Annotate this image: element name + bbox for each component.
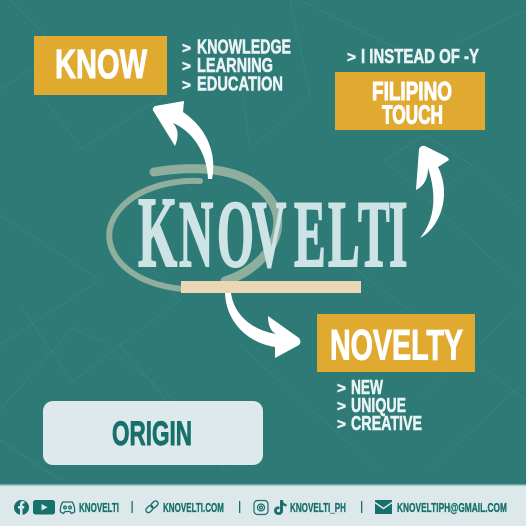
text block: novelty list: CREATIVE <box>351 412 422 435</box>
logo wordmark: KNOVELTI <box>138 177 407 289</box>
text block: novelty list <box>337 376 422 435</box>
text block: i instead of y: I INSTEAD OF -Y <box>361 45 479 68</box>
logo underline <box>181 281 361 293</box>
text block: know list: > <box>182 40 191 57</box>
text block: i instead of y <box>347 45 479 68</box>
panel: origin: ORIGIN <box>112 415 192 453</box>
icon: youtube <box>33 500 55 514</box>
text block: novelty list: UNIQUE <box>351 394 406 417</box>
icon: mail <box>375 500 392 514</box>
panel: know: KNOW <box>55 41 147 87</box>
icon: link <box>145 500 159 514</box>
panel: filipino touch: TOUCH <box>382 100 443 130</box>
panel: filipino touch <box>335 72 485 130</box>
text block: novelty list: > <box>337 380 346 397</box>
text block: i instead of y: > <box>347 49 356 66</box>
arrow: logo to novelty <box>225 293 300 358</box>
logo circle scribble <box>109 169 278 289</box>
panel: novelty <box>317 314 475 372</box>
footer text: discord handle: KNOVELTI <box>79 501 119 515</box>
text block: know list: KNOWLEDGE <box>197 36 291 58</box>
text block: know list <box>182 36 291 96</box>
panel: filipino touch: FILIPINO <box>372 76 452 106</box>
footer bar <box>0 484 526 526</box>
text block: novelty list: NEW <box>351 376 383 399</box>
text block: novelty list: > <box>337 416 346 433</box>
arrow: logo to know <box>153 101 213 179</box>
panel: novelty: NOVELTY <box>330 322 463 370</box>
panel: origin <box>43 401 263 465</box>
icon: facebook <box>14 500 29 515</box>
panel: know <box>34 36 167 95</box>
icon: discord <box>60 502 75 514</box>
text block: know list: > <box>182 58 191 75</box>
text block: know list: EDUCATION <box>197 72 283 96</box>
text block: know list: LEARNING <box>197 54 273 77</box>
icon: instagram <box>254 500 268 514</box>
footer text: social handle: KNOVELTI_PH <box>290 501 346 515</box>
footer text: website: KNOVELTI.COM <box>163 501 224 515</box>
text block: novelty list: > <box>337 398 346 415</box>
icon: tiktok <box>274 500 286 515</box>
arrow: logo to filipino touch <box>416 146 449 238</box>
text block: know list: > <box>182 77 191 94</box>
